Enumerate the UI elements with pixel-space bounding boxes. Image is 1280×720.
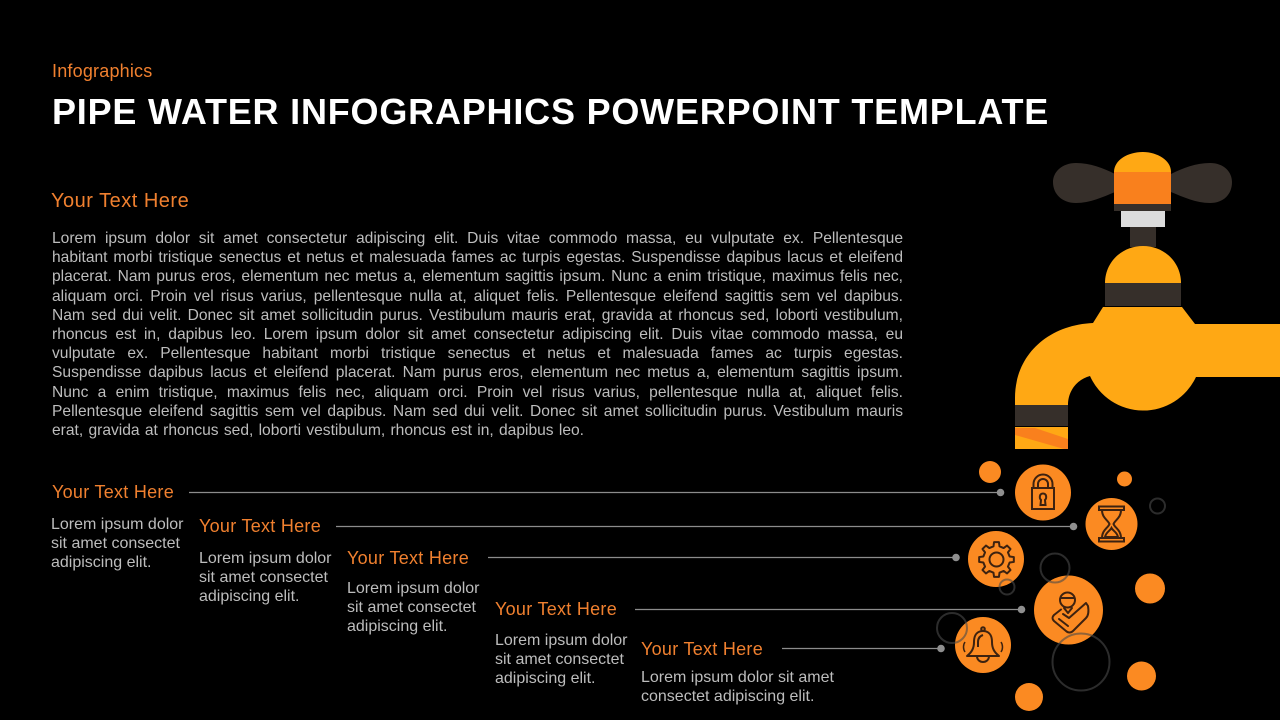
item 4 heading: Your Text Here xyxy=(495,599,617,619)
item 1 text xyxy=(51,516,184,571)
connector line 5 xyxy=(782,645,945,652)
icon: lock xyxy=(1015,464,1071,520)
main paragraph: Pellentesque eleifend sagittis sem vel dapibus. Nam sed dui velit. Donec sit amet sollicitudin purus. Vestibulum mauris xyxy=(52,403,903,420)
decorative bubbles xyxy=(937,498,1165,690)
main paragraph: Nunc a enim tristique, maximus felis nec, aliquam orci. Proin vel risus varius, pellentesque nulla at, aliquet felis. xyxy=(52,384,903,400)
item 2 text: adipiscing elit. xyxy=(199,588,300,605)
item 5 text: consectet adipiscing elit. xyxy=(641,688,814,705)
item 3 text: adipiscing elit. xyxy=(347,618,448,635)
faucet xyxy=(1015,152,1280,449)
main paragraph: habitant morbi tristique senectus et netus et malesuada fames ac turpis egestas. Suspendisse dapibus lacus et eleifend xyxy=(52,249,903,266)
connector line 4 xyxy=(635,606,1025,613)
item 2 heading: Your Text Here xyxy=(199,516,321,536)
eyebrow label: Infographics xyxy=(52,61,152,81)
main paragraph: aliquam orci. Proin vel risus varius, pellentesque nulla at, aliquet felis. Pellentesque eleifend sagittis sem vel dapibus. xyxy=(52,288,903,305)
main heading: Your Text Here xyxy=(51,190,189,212)
main paragraph: Nam sed dui velit. Donec sit amet sollicitudin purus. Vestibulum mauris erat, gravida at rhoncus sed, loborti vestibulum, xyxy=(52,307,903,324)
main paragraph: Lorem ipsum dolor sit amet consectetur adipiscing elit. Duis vitae commodo massa, eu vulputate ex. Pellentesque xyxy=(52,230,903,247)
item 1 text: adipiscing elit. xyxy=(51,554,152,571)
item 2 text xyxy=(199,550,332,605)
icon: person with check mark xyxy=(1034,576,1103,644)
item 4 text: adipiscing elit. xyxy=(495,670,596,687)
item 2 text: sit amet consectet xyxy=(199,569,328,586)
item 5 text xyxy=(641,669,834,705)
faucet body and pipe xyxy=(1015,246,1280,449)
connector line 3 xyxy=(488,554,960,561)
item 5 text: Lorem ipsum dolor sit amet xyxy=(641,669,834,686)
item 5 heading: Your Text Here xyxy=(641,639,763,659)
item 1 text: Lorem ipsum dolor xyxy=(51,516,184,533)
item 4 text: sit amet consectet xyxy=(495,651,624,668)
title: PIPE WATER INFOGRAPHICS POWERPOINT TEMPLATE xyxy=(52,91,1049,132)
item 1 text: sit amet consectet xyxy=(51,535,180,552)
main paragraph: vulputate ex. Pellentesque habitant morbi tristique senectus et netus et malesuada fames ac turpis egestas. xyxy=(52,345,903,362)
item 3 heading: Your Text Here xyxy=(347,548,469,568)
main paragraph: erat, gravida at rhoncus sed, loborti vestibulum, rhoncus est in, dapibus leo. xyxy=(52,422,584,439)
item 3 text xyxy=(347,580,480,635)
water drops xyxy=(979,461,1165,711)
main paragraph xyxy=(52,230,903,439)
faucet handle wings xyxy=(1053,163,1232,203)
item 3 text: sit amet consectet xyxy=(347,599,476,616)
item 4 text xyxy=(495,632,628,687)
icon: bell xyxy=(955,617,1011,673)
main paragraph: rhoncus est in, dapibus leo. Lorem ipsum dolor sit amet consectetur adipiscing elit. Duis vitae commodo massa, eu xyxy=(52,326,903,343)
connector line 1 xyxy=(189,489,1004,496)
item 1 heading: Your Text Here xyxy=(52,482,174,502)
item 3 text: Lorem ipsum dolor xyxy=(347,580,480,597)
icon: hourglass xyxy=(1086,498,1138,550)
item 4 text: Lorem ipsum dolor xyxy=(495,632,628,649)
main paragraph: Suspendisse dapibus lacus et eleifend placerat. Nam purus eros, elementum nec metus a, elementum sagittis ipsum. xyxy=(52,364,903,381)
icon: gear xyxy=(968,531,1024,587)
faucet cap xyxy=(1114,152,1171,247)
item 2 text: Lorem ipsum dolor xyxy=(199,550,332,567)
main paragraph: placerat. Nam purus eros, elementum nec metus a, elementum sagittis ipsum. Nunc a enim tristique, maximus felis nec, xyxy=(52,268,903,285)
connector line 2 xyxy=(336,523,1077,530)
